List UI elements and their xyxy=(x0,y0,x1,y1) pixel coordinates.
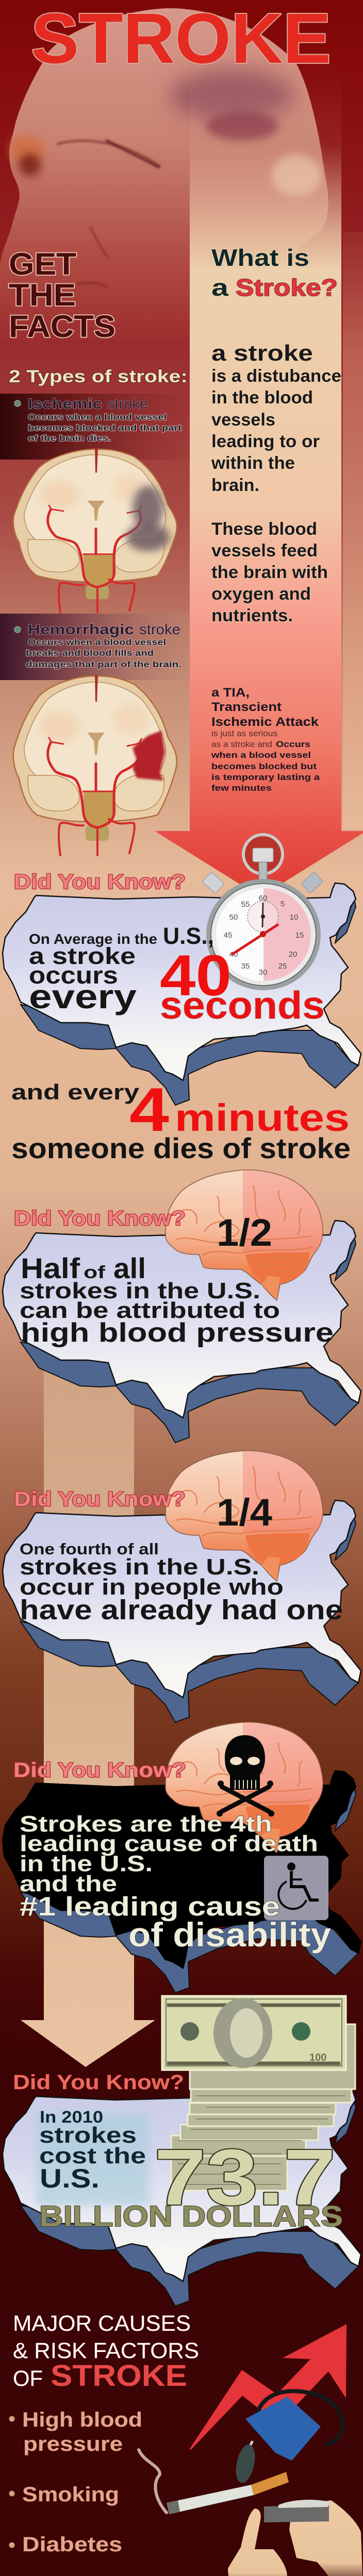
stopwatch: 20 xyxy=(289,950,297,959)
definition text: within the xyxy=(211,453,295,473)
US map 4 black xyxy=(3,1771,361,1993)
definition text: is a distubance xyxy=(211,366,341,386)
definition text: vessels xyxy=(211,410,275,430)
US map 3 xyxy=(3,1500,361,1722)
TIA text: becomes blocked but xyxy=(211,761,317,771)
stopwatch: 35 xyxy=(241,962,250,971)
TIA text: Transcient xyxy=(211,700,282,714)
text: in 2010 strokes cost the US: strokes xyxy=(39,2123,137,2148)
text: one fourth of all strokes: strokes in the U.S. xyxy=(20,1554,259,1580)
definition text: vessels feed xyxy=(211,541,318,561)
stat: every 4 minutes someone dies: and every xyxy=(11,1080,140,1104)
stat: 1/4: 1/4 xyxy=(217,1491,272,1534)
icon: cigarette xyxy=(139,2450,289,2514)
stopwatch: 50 xyxy=(229,913,238,922)
text: on average in the US: U.S., xyxy=(163,923,214,949)
heading: get the facts xyxy=(9,247,116,344)
arrow: What is a stroke panel xyxy=(155,62,363,897)
band: ischemic stroke xyxy=(0,394,190,460)
definition text: leading to or xyxy=(211,432,320,451)
text: half of all strokes: all xyxy=(113,1252,146,1284)
hemorrhagic stroke text: Hemorrhagic xyxy=(28,621,134,637)
text: one fourth of all strokes: occur in people who xyxy=(20,1574,284,1600)
heading: 2 types of stroke: 2 Types of stroke: xyxy=(9,367,188,386)
ischemic stroke text: Ischemic xyxy=(28,396,102,412)
text: 4th leading cause of death: of disability xyxy=(128,1916,331,1954)
text: half of all strokes: high blood pressure xyxy=(21,1318,334,1348)
hemorrhagic stroke text: damages that part of the brain. xyxy=(26,659,182,669)
heading: what is a stroke: Stroke? xyxy=(236,274,338,301)
text: 4th leading cause of death xyxy=(20,1811,331,1954)
text: 4th leading cause of death: and the xyxy=(20,1871,117,1896)
ischemic stroke text: stroke xyxy=(107,396,148,412)
heading: did you know 1: Did You Know? xyxy=(14,871,186,893)
stopwatch: 25 xyxy=(278,962,287,971)
TIA text: is just as serious xyxy=(211,728,277,738)
heading: did you know 3: Did You Know? xyxy=(14,1488,186,1511)
ischemic stroke text: becomes blocked and that part xyxy=(28,423,182,433)
heading: get the facts: FACTS xyxy=(9,309,116,344)
ischemic stroke text: of the brain dies. xyxy=(28,433,111,443)
heading: did you know 2: Did You Know? xyxy=(14,1207,186,1230)
text: on average in the US: a stroke xyxy=(29,943,136,969)
heading: get the facts: GET xyxy=(9,247,76,281)
US map 1 xyxy=(3,883,361,1105)
stat: 40 seconds: seconds xyxy=(160,984,325,1027)
icon: skull and crossbones xyxy=(217,1735,274,1817)
stopwatch: 40 xyxy=(229,950,238,959)
stopwatch: 15 xyxy=(295,931,304,940)
stat: 73.7 billion dollars xyxy=(39,2133,343,2233)
stopwatch: 5 xyxy=(280,900,285,908)
right margin strip xyxy=(343,232,363,829)
text: on average in the US: On Average in the xyxy=(29,931,157,947)
stopwatch: 45 xyxy=(224,931,232,940)
text: half of all strokes: Half xyxy=(21,1252,80,1284)
text: one fourth of all strokes xyxy=(20,1540,343,1625)
heading: get the facts: THE xyxy=(9,278,76,312)
top bill xyxy=(162,1996,346,2070)
heading: did you know 5: Did You Know? xyxy=(13,2071,184,2094)
top bill: 100 xyxy=(309,2052,326,2063)
stopwatch: 10 xyxy=(290,913,298,922)
hemorrhagic stroke text: stroke xyxy=(139,621,180,637)
text: on average in the US: occurs xyxy=(29,961,118,989)
TIA text: as a stroke and xyxy=(211,739,272,749)
TIA text: Occurs xyxy=(276,739,310,749)
definition text: nutrients. xyxy=(211,606,293,625)
icon: wheelchair sign xyxy=(264,1856,328,1920)
heading: what is a stroke xyxy=(211,244,338,301)
text: half of all strokes xyxy=(20,1252,334,1348)
text: 4th leading cause of death: #1 leading cause xyxy=(20,1892,280,1922)
definition text: These blood xyxy=(211,519,317,539)
list: risk factors: Smoking xyxy=(22,2483,119,2506)
heading: major causes and risk factors: STROKE xyxy=(51,2359,187,2393)
definition text xyxy=(211,341,341,625)
main title: STROKE xyxy=(31,0,331,78)
text: in 2010 strokes cost the US: U.S. xyxy=(40,2164,100,2194)
text: on average in the US xyxy=(29,923,214,1015)
text: 4th leading cause of death: in the U.S. xyxy=(20,1851,153,1876)
text: 4th leading cause of death: Strokes are the 4th xyxy=(20,1811,272,1837)
definition text: a stroke xyxy=(211,341,313,366)
hemorrhagic stroke text: Occurs when a blood vessel xyxy=(28,637,166,647)
stat: every 4 minutes someone dies: minutes xyxy=(175,1096,350,1139)
heading: major causes and risk factors: MAJOR CAUSES xyxy=(13,2311,191,2336)
definition text: brain. xyxy=(211,476,259,495)
text: in 2010 strokes cost the US: In 2010 xyxy=(40,2108,103,2126)
ischemic stroke text: Occurs when a blood vessel xyxy=(28,412,167,422)
brain: one fourth xyxy=(166,1451,323,1581)
icon: blood pressure cuff xyxy=(233,2391,342,2485)
brain: hemorrhagic stroke xyxy=(13,675,177,855)
US map 2 xyxy=(3,1221,361,1443)
second large arrow xyxy=(21,1319,155,2067)
icon: hands with glucose meter xyxy=(228,2500,363,2576)
text: one fourth of all strokes: One fourth of all xyxy=(20,1540,159,1558)
heading: did you know 4: Did You Know? xyxy=(13,1759,186,1782)
text: one fourth of all strokes: have already had one xyxy=(20,1595,343,1625)
stopwatch: 55 xyxy=(241,900,250,909)
TIA text: few minutes xyxy=(211,783,272,793)
US map 5 xyxy=(3,2084,361,2306)
brain: ischemic stroke xyxy=(13,448,177,612)
stat: every 4 minutes someone dies: 4 xyxy=(129,1075,169,1144)
text: on average in the US: every xyxy=(29,977,137,1015)
stat: 73.7 billion dollars: 73.7 xyxy=(154,2133,336,2222)
TIA text xyxy=(211,686,320,793)
definition text: the brain with xyxy=(211,563,328,582)
stopwatch xyxy=(202,835,323,990)
TIA text: is temporary lasting a xyxy=(211,772,320,782)
definition text: in the blood xyxy=(211,388,313,408)
stack of dollar bills xyxy=(162,1996,355,2191)
definition text: oxygen and xyxy=(211,584,311,604)
TIA text: when a blood vessel xyxy=(211,750,311,760)
text: in 2010 strokes cost the US xyxy=(39,2108,146,2194)
text: 4th leading cause of death: leading cause of death xyxy=(20,1831,318,1856)
brain: skull xyxy=(166,1722,323,1853)
TIA text: Ischemic Attack xyxy=(211,715,319,729)
band: hemorrhagic stroke xyxy=(0,614,190,680)
list: risk factors: Diabetes xyxy=(22,2533,122,2556)
stat: 1/2: 1/2 xyxy=(217,1211,272,1254)
stat: every 4 minutes someone dies xyxy=(11,1075,351,1164)
stat: 40 seconds: 40 xyxy=(160,943,232,1008)
text: half of all strokes: can be attributed to xyxy=(20,1298,280,1323)
text: half of all strokes: strokes in the U.S. xyxy=(20,1278,260,1303)
brain: one half xyxy=(166,1170,323,1300)
hemorrhagic stroke text: breaks and blood fills and xyxy=(26,648,154,658)
icon: rising red arrow xyxy=(190,2324,346,2450)
TIA text: a TIA, xyxy=(211,686,250,700)
list: risk factors xyxy=(9,2409,209,2576)
heading: what is a stroke: a xyxy=(211,274,229,301)
text: half of all strokes: of xyxy=(84,1263,106,1282)
ischemic stroke text xyxy=(14,396,182,443)
stat: every 4 minutes someone dies: someone dies of stroke xyxy=(11,1132,351,1164)
photo: man's face xyxy=(0,8,328,340)
stopwatch: 30 xyxy=(259,968,267,977)
list: risk factors: pressure xyxy=(23,2433,123,2455)
heading: what is a stroke: What is xyxy=(211,244,309,271)
list: risk factors: High blood xyxy=(22,2409,142,2431)
heading: major causes and risk factors xyxy=(13,2311,199,2393)
stat: 40 seconds xyxy=(160,943,325,1027)
hemorrhagic stroke text xyxy=(14,621,182,669)
text: in 2010 strokes cost the US: cost the xyxy=(39,2143,146,2168)
heading: major causes and risk factors: OF xyxy=(13,2366,43,2391)
heading: major causes and risk factors: & RISK FACTORS xyxy=(13,2338,199,2363)
stat: 73.7 billion dollars: BILLION DOLLARS xyxy=(39,2200,343,2233)
stopwatch: 60 xyxy=(259,894,267,903)
